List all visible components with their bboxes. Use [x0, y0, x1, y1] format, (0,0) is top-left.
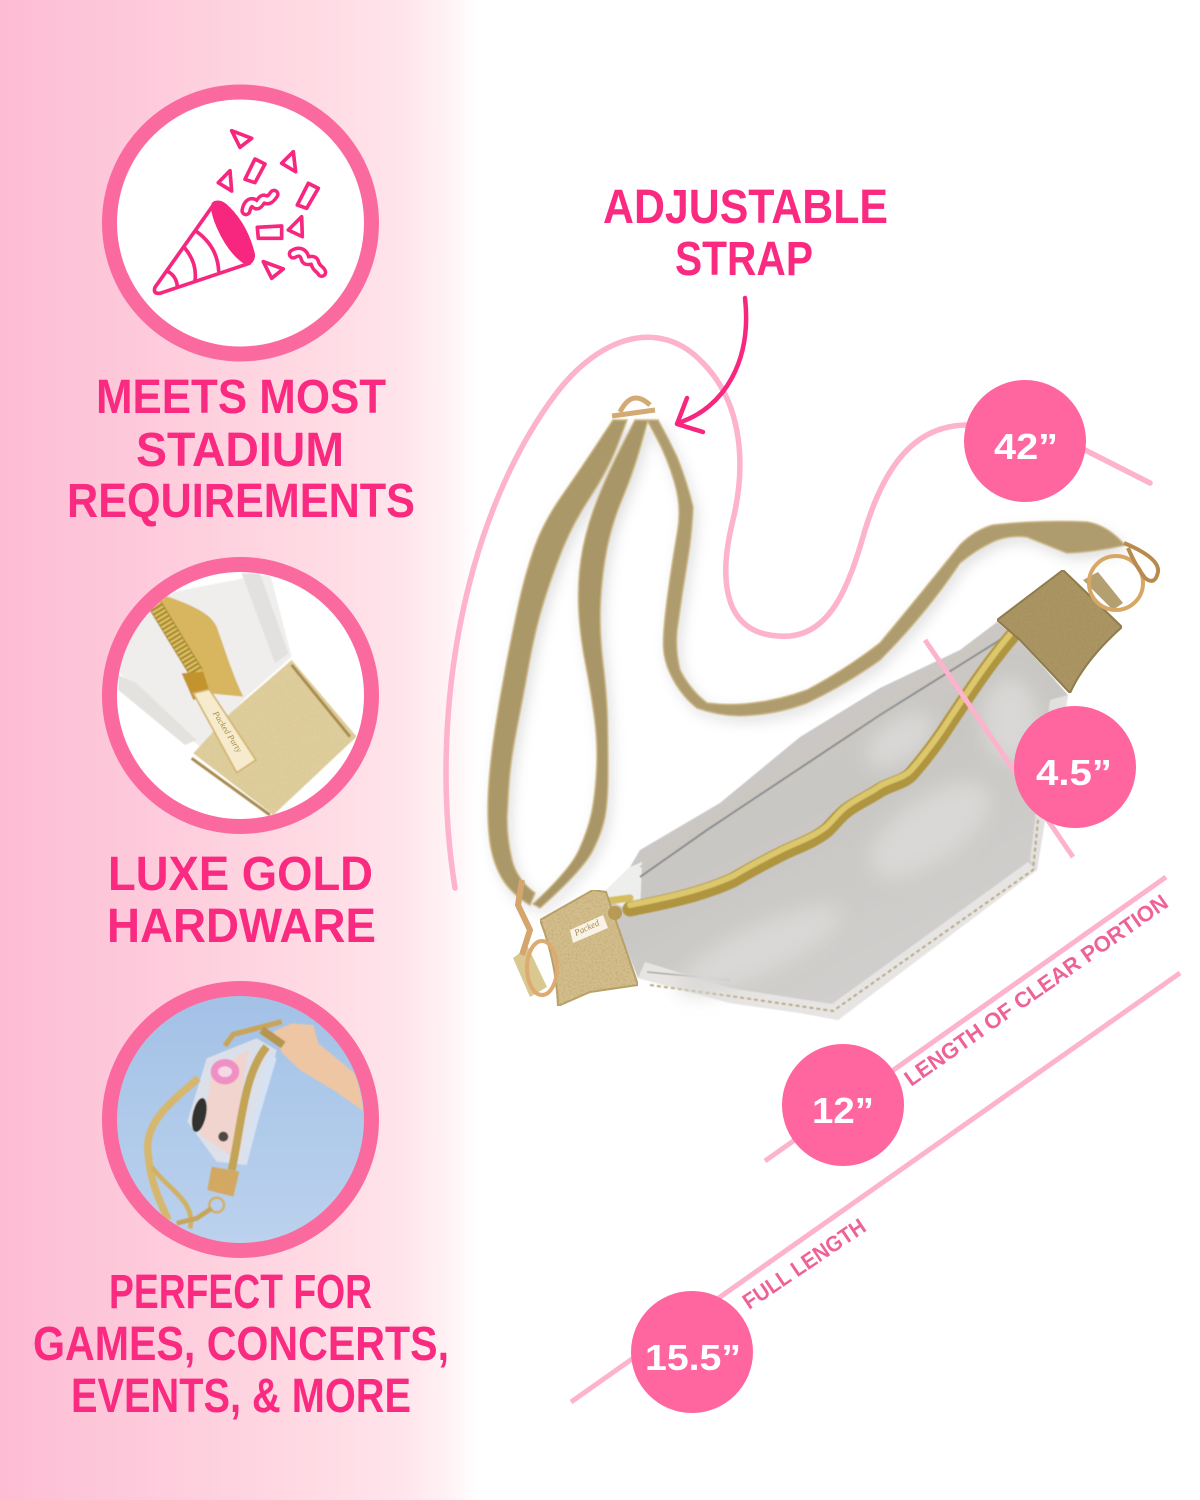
curve: 42 inch strap length line — [446, 337, 1150, 888]
dimension: 42 inch: 42” — [994, 426, 1058, 467]
dimension: 42 inch — [964, 380, 1086, 502]
zipper — [600, 632, 1012, 909]
dimension: 15.5 inch full length — [571, 973, 1180, 1413]
dimension: 4.5 inch: 4.5” — [1036, 752, 1112, 793]
heading: luxe gold hardware — [107, 848, 376, 953]
zipper pull logo: Packed Party — [210, 708, 244, 754]
badge: bag held against the sky photo — [110, 988, 372, 1250]
heading: meets most stadium requirements: STADIUM — [136, 424, 344, 477]
badge: gold hardware close-up photo — [110, 564, 372, 826]
tab logo: Packed — [572, 917, 601, 938]
dimension: 15.5 inch full length: 15.5” — [645, 1337, 741, 1378]
dimension: 12 inch length of clear portion: 12” — [812, 1090, 874, 1131]
heading: meets most stadium requirements: REQUIREMENTS — [67, 475, 415, 528]
left gold tab and ring — [513, 880, 638, 1006]
product: clear belt bag with gold strap — [488, 398, 1158, 1020]
heading: adjustable strap: STRAP — [675, 233, 813, 286]
heading: luxe gold hardware: HARDWARE — [107, 900, 376, 953]
heading: perfect for games, concerts, events and more — [33, 1266, 449, 1423]
icon: party popper — [154, 131, 322, 293]
heading: meets most stadium requirements — [67, 371, 415, 528]
dimension: 12 inch length of clear portion — [765, 877, 1173, 1166]
heading: meets most stadium requirements: MEETS MOST — [96, 371, 386, 424]
heading: adjustable strap — [603, 181, 888, 286]
soft shadow — [492, 426, 1129, 914]
dimension: 4.5 inch — [925, 640, 1136, 857]
heading: perfect for games, concerts, events and more: GAMES, CONCERTS, — [33, 1318, 449, 1371]
badge: confetti popper icon — [110, 92, 372, 354]
dimension: 12 inch length of clear portion: LENGTH OF CLEAR PORTION — [900, 889, 1173, 1091]
heading: perfect for games, concerts, events and more: EVENTS, & MORE — [71, 1370, 411, 1423]
heading: adjustable strap: ADJUSTABLE — [603, 181, 888, 234]
strap bands — [488, 420, 1125, 908]
dimension: 15.5 inch full length: FULL LENGTH — [738, 1213, 870, 1314]
strap buckle — [612, 398, 655, 416]
arrow: points to the strap adjuster — [677, 298, 746, 432]
heading: luxe gold hardware: LUXE GOLD — [108, 848, 373, 901]
bag clear body — [603, 622, 1068, 1020]
heading: perfect for games, concerts, events and more: PERFECT FOR — [109, 1266, 372, 1319]
right gold tab and ring — [997, 543, 1158, 693]
